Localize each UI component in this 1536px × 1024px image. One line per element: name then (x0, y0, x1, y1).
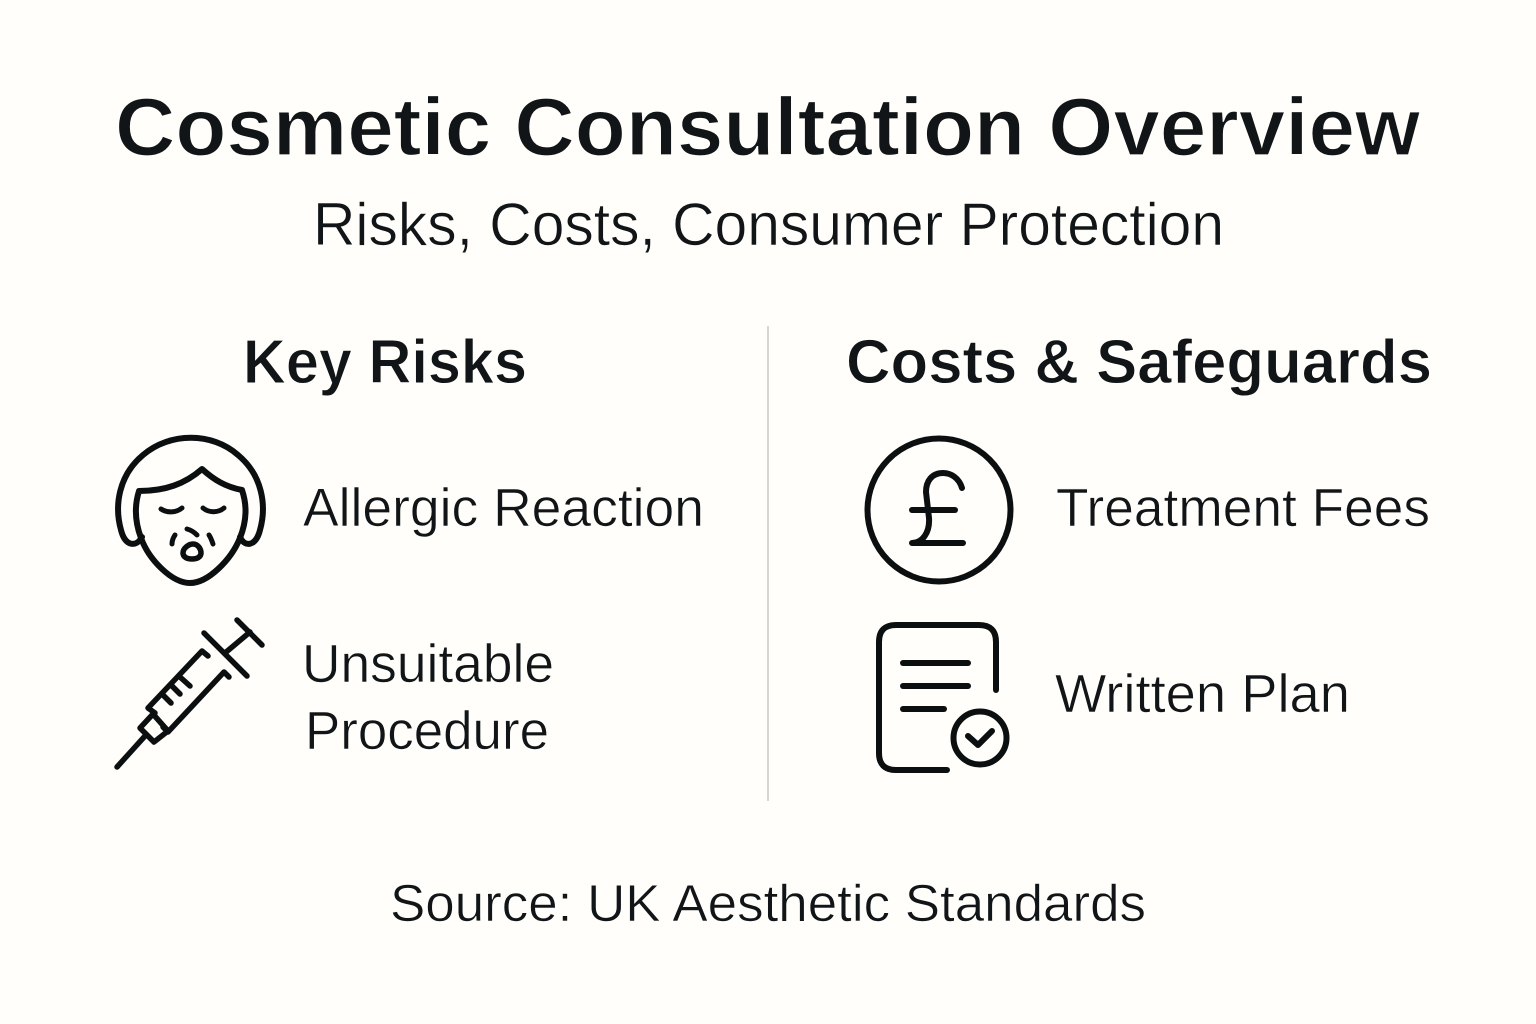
source note: Source: UK Aesthetic Standards (390, 875, 1146, 933)
icon: pound coin (868, 438, 1010, 582)
subtitle: Risks, Costs, Consumer Protection (313, 191, 1224, 258)
icon: document with check (879, 625, 1006, 770)
label: unsuitable procedure: Unsuitable (302, 634, 554, 694)
heading: costs and safeguards: Costs & Safeguards (846, 328, 1432, 397)
label: unsuitable procedure (302, 634, 554, 761)
title: Cosmetic Consultation Overview (115, 82, 1420, 173)
panel: costs and safeguards (846, 328, 1432, 770)
label: allergic reaction: Allergic Reaction (303, 478, 704, 538)
heading: key risks: Key Risks (243, 328, 527, 397)
label: treatment fees: Treatment Fees (1056, 478, 1430, 538)
icon: face with allergic reaction (118, 438, 263, 583)
panel: key risks (117, 328, 704, 767)
label: unsuitable procedure: Procedure (305, 701, 549, 761)
label: written plan: Written Plan (1055, 664, 1350, 724)
icon: syringe (117, 620, 262, 767)
